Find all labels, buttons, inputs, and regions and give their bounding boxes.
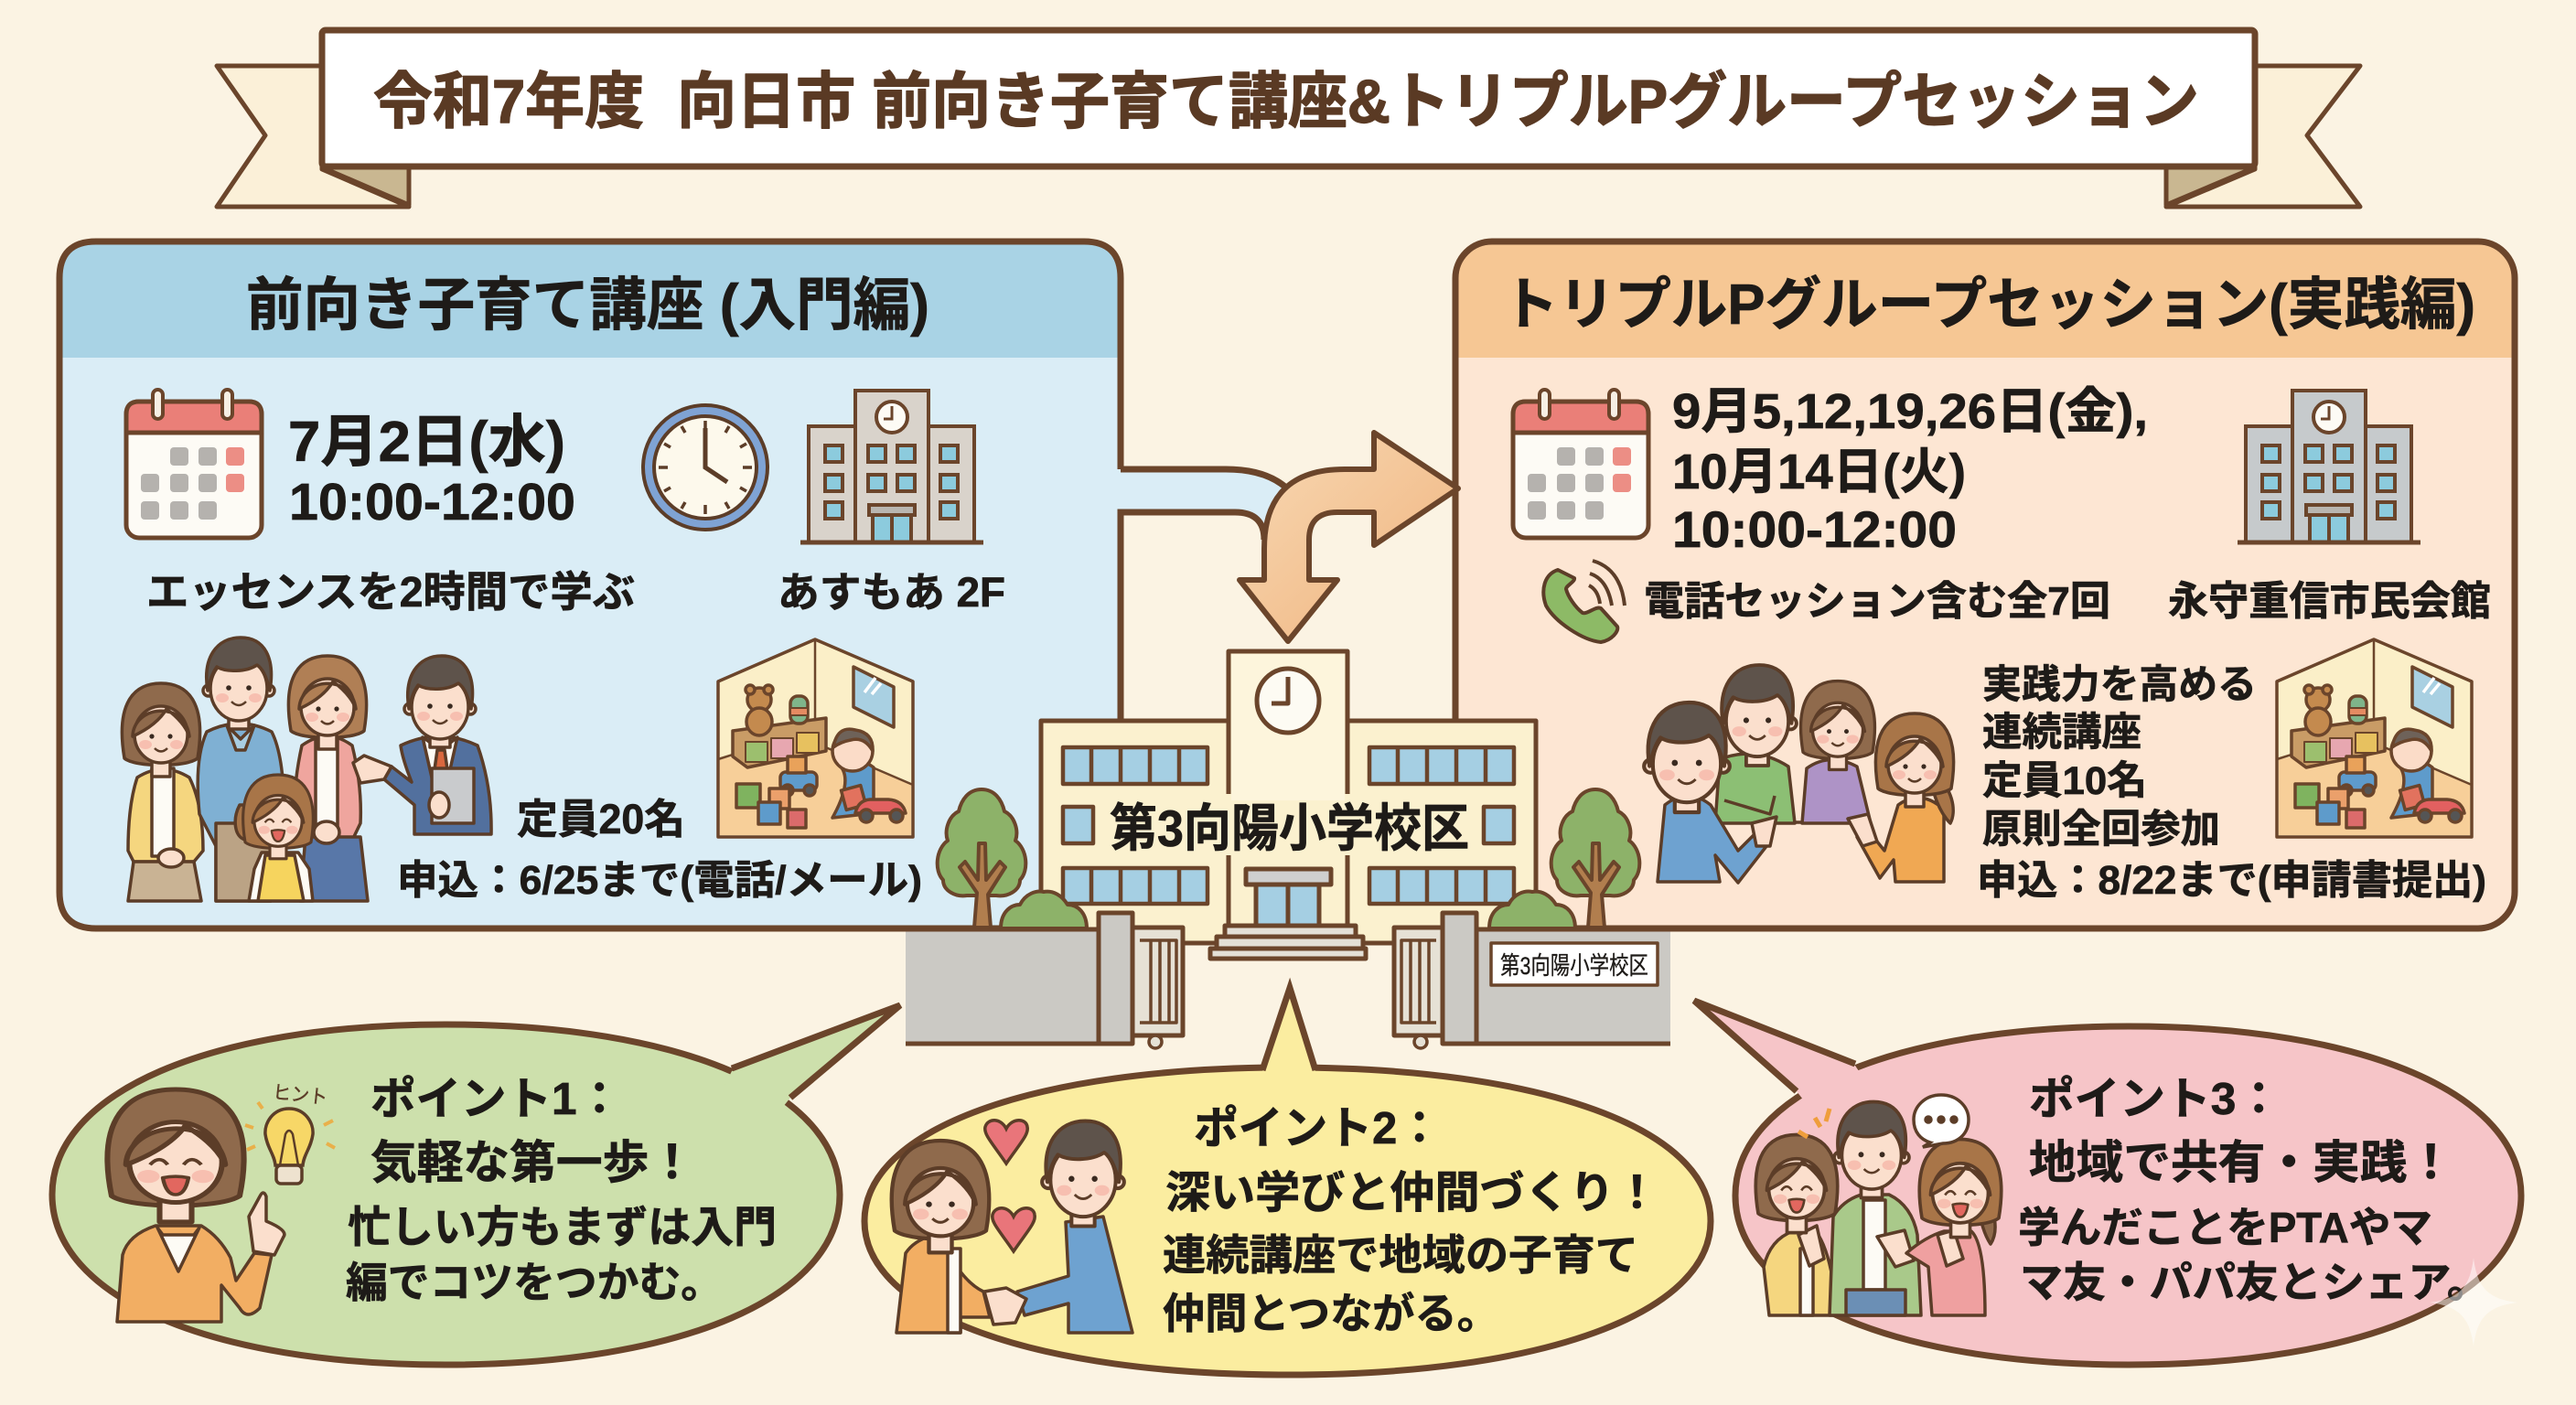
panel heading: トリプルPグループセッション(実践編) <box>1502 273 2475 337</box>
bubble tail outline <box>1262 988 1315 1070</box>
point text line 1: 忙しい方もまずは入門 <box>348 1203 777 1251</box>
bubble tail outline <box>732 1005 900 1098</box>
time: 10:00-12:00 <box>289 473 575 531</box>
ribbon tail: left <box>217 66 409 207</box>
school name: 第3向陽小学校区 <box>1110 799 1469 857</box>
panel header band <box>59 241 1121 358</box>
wall: left <box>906 913 1183 1048</box>
bush right <box>1489 892 1575 928</box>
panel outline <box>1455 241 2515 928</box>
panel heading: 前向き子育て講座 (入門編) <box>246 273 929 338</box>
watermark sparkle <box>2430 1258 2517 1346</box>
bubble <box>52 1024 840 1365</box>
point title: 気軽な第一歩！ <box>370 1137 695 1188</box>
bushes <box>1001 892 1087 928</box>
point heading: ポイント1： <box>370 1075 622 1124</box>
point text line 2: マ友・パパ友とシェア。 <box>2020 1259 2490 1306</box>
illustration: childcare room <box>2277 639 2472 837</box>
panel header band <box>1455 241 2515 358</box>
bubble <box>1735 1026 2521 1365</box>
illustration: group discussion <box>1644 665 1954 883</box>
title banner <box>217 30 2360 207</box>
description: エッセンスを2時間で学ぶ <box>146 568 635 616</box>
bubble tail <box>723 1005 900 1125</box>
connector stub <box>1118 469 1288 540</box>
illustration: family and instructor <box>122 638 491 901</box>
callout: ポイント1 <box>52 1005 900 1365</box>
wall: right <box>1394 913 1670 1048</box>
illustration: childcare room <box>718 639 913 837</box>
banner plate <box>322 30 2255 166</box>
title: 令和7年度 向日市 前向き子育て講座&トリプルPグループセッション <box>373 68 2199 136</box>
icon: sparkle marks <box>1798 1109 1830 1137</box>
icon: speech bubble <box>1914 1095 1969 1147</box>
illustration: pointing woman <box>107 1089 284 1322</box>
windows <box>1063 747 1514 904</box>
icon: heart <box>993 1208 1035 1251</box>
dates line 2: 10月14日(火) <box>1672 445 1966 499</box>
ribbon fold: left <box>322 167 409 205</box>
illustration: elementary school <box>906 651 1670 1048</box>
panel: トリプルPグループセッション <box>1455 241 2515 928</box>
ribbon tail: right <box>2166 66 2360 207</box>
icon: venue building <box>800 391 983 542</box>
line 2: 連続講座 <box>1982 711 2141 755</box>
point text line 2: 編でコツをつかむ。 <box>346 1259 723 1306</box>
conditions <box>1982 663 2257 852</box>
hint label: ヒント <box>272 1082 328 1109</box>
arrow: two-way connector <box>1240 433 1458 641</box>
illustration: three friends talking <box>1755 1101 2002 1315</box>
tree: left <box>938 789 1025 928</box>
point heading: ポイント3： <box>2029 1075 2281 1124</box>
icon: calendar <box>1513 390 1648 538</box>
sessions: 電話セッション含む全7回 <box>1644 579 2110 624</box>
gate plate text: 第3向陽小学校区 <box>1500 952 1648 980</box>
time: 10:00-12:00 <box>1672 500 1957 558</box>
clock <box>1257 669 1319 733</box>
callout: ポイント2 <box>864 982 1711 1375</box>
point title: 深い学びと仲間づくり！ <box>1165 1169 1659 1217</box>
date: 7月2日(水) <box>288 411 565 474</box>
point text line 1: 学んだことをPTAやマ <box>2018 1204 2432 1251</box>
point heading: ポイント2： <box>1194 1104 1442 1153</box>
panel body <box>1455 241 2515 928</box>
illustration: handshake with hearts <box>892 1121 1132 1333</box>
line 1: 実践力を高める <box>1982 663 2257 707</box>
icon: calendar <box>126 390 262 538</box>
icon: telephone <box>1543 561 1625 642</box>
bubble tail <box>1694 1001 1871 1116</box>
school wings <box>1041 721 1536 943</box>
tree: right <box>1551 789 1639 928</box>
line 4: 原則全回参加 <box>1982 808 2220 852</box>
callout: ポイント3 <box>1694 1001 2521 1365</box>
icon: venue building <box>2238 391 2420 542</box>
point text line 2: 仲間とつながる。 <box>1163 1290 1499 1337</box>
venue: 永守重信市民会館 <box>2168 579 2491 624</box>
application: 申込：8/22まで(申請書提出) <box>1977 858 2486 903</box>
application: 申込：6/25まで(電話/メール) <box>397 858 922 903</box>
icon: heart <box>985 1121 1027 1164</box>
dates: 9月5,12,19,26日(金), <box>1672 384 2148 439</box>
panel body <box>59 241 1121 928</box>
panel outline <box>59 241 1288 928</box>
icon: light bulb <box>245 1102 335 1184</box>
panel: 前向き子育て講座 <box>59 241 1288 928</box>
school tower <box>1229 651 1347 926</box>
bubble <box>864 1067 1711 1375</box>
ribbon fold: right <box>2166 167 2255 205</box>
line 3: 定員10名 <box>1982 759 2147 803</box>
tower fill <box>1231 654 1345 800</box>
venue: あすもあ 2F <box>778 569 1005 616</box>
point text line 1: 連続講座で地域の子育て <box>1163 1231 1638 1279</box>
point title: 地域で共有・実践！ <box>2029 1137 2454 1188</box>
capacity: 定員20名 <box>517 796 685 842</box>
gate plate <box>1491 943 1658 985</box>
icon: clock <box>643 405 767 530</box>
bubble tail outline <box>1694 1001 1855 1091</box>
bubble tail <box>1261 982 1317 1089</box>
entrance <box>1210 869 1366 959</box>
